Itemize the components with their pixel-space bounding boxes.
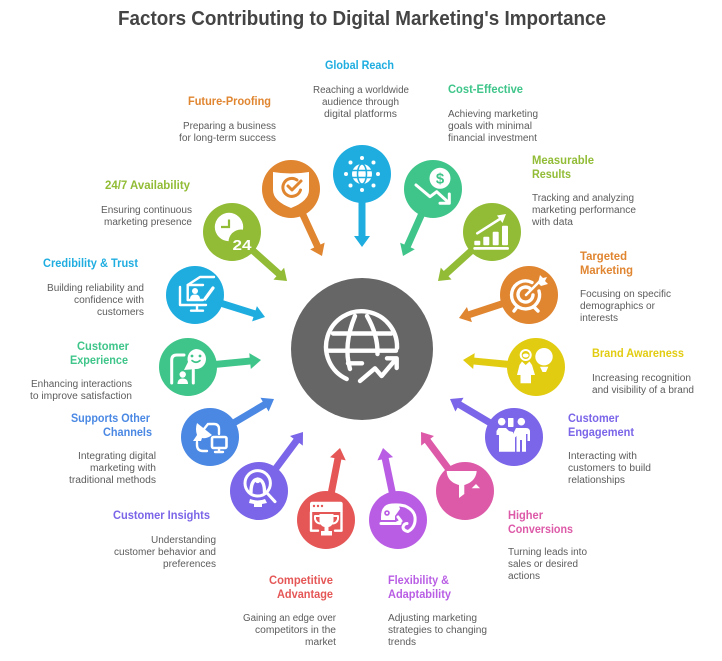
heading and description: to improve satisfaction xyxy=(30,391,132,402)
arrow xyxy=(206,392,278,444)
heading and description: Customer xyxy=(568,411,619,425)
icon: shield with check xyxy=(262,160,320,218)
factor: Global Reach xyxy=(313,58,409,247)
factor: Credibility & Trust xyxy=(43,256,267,325)
icon: globe with growth arrow xyxy=(326,311,397,381)
heading and description: customer behavior and xyxy=(114,547,216,558)
icon: dollar coin with falling arrow: $ xyxy=(436,170,445,188)
heading and description: marketing with xyxy=(90,463,156,474)
factor: Competitive Advantage xyxy=(243,446,355,648)
heading and description: market xyxy=(305,637,336,648)
heading and description: preferences xyxy=(163,559,216,570)
heading and description: Focusing on specific xyxy=(580,289,671,300)
arrow xyxy=(192,287,267,325)
icon: person with smiling speech bubble xyxy=(159,338,217,396)
heading and description xyxy=(69,411,156,486)
heading and description: for long-term success xyxy=(179,133,276,144)
heading and description: Gaining an edge over xyxy=(243,613,337,624)
heading and description: strategies to changing xyxy=(388,625,487,636)
heading and description xyxy=(592,346,694,396)
arrow xyxy=(462,352,537,375)
heading and description: sales or desired xyxy=(508,559,578,570)
heading and description: Customer xyxy=(77,339,129,353)
arrow xyxy=(415,427,472,496)
icon: network globe xyxy=(333,145,391,203)
heading and description: Marketing xyxy=(580,263,633,277)
heading and description: Adaptability xyxy=(388,587,451,601)
heading and description: Understanding xyxy=(151,535,216,546)
heading and description: Integrating digital xyxy=(78,451,156,462)
icon: funnel xyxy=(436,462,494,520)
heading and description xyxy=(388,573,487,648)
heading and description: marketing presence xyxy=(104,217,192,228)
heading and description: Tracking and analyzing xyxy=(532,193,634,204)
icon: magnifier over person xyxy=(230,462,288,520)
heading and description: Cost-Effective xyxy=(448,82,523,96)
arrow xyxy=(318,446,348,522)
heading and description: Future-Proofing xyxy=(188,94,271,108)
heading and description: Measurable xyxy=(532,153,594,167)
heading and description: customers xyxy=(97,307,144,318)
arrow xyxy=(433,225,498,287)
heading and description xyxy=(568,411,651,486)
heading and description: Higher xyxy=(508,508,543,522)
heading and description: Experience xyxy=(70,353,128,367)
heading and description: Preparing a business xyxy=(183,121,276,132)
heading and description: Flexibility & xyxy=(388,573,449,587)
arrow xyxy=(226,226,292,287)
heading and description: Results xyxy=(532,167,571,181)
heading and description: audience through xyxy=(322,97,399,108)
heading and description: Targeted xyxy=(580,249,627,263)
arrow xyxy=(354,173,370,247)
factor: Supports Other Channels xyxy=(69,392,278,486)
heading and description: Ensuring continuous xyxy=(101,205,192,216)
icon: clock with 24 xyxy=(203,203,261,261)
heading and description xyxy=(43,256,144,318)
heading and description: traditional methods xyxy=(69,475,156,486)
heading and description: Increasing recognition xyxy=(592,373,691,384)
central hub: digital marketing globe xyxy=(291,278,433,420)
factor: Targeted Marketing xyxy=(457,249,671,326)
icon: two people at desk xyxy=(485,408,543,466)
title: Factors Contributing to Digital Marketing's Importance xyxy=(118,8,606,30)
arrow xyxy=(187,352,262,375)
factor: Higher Conversions xyxy=(415,427,587,582)
factor: Customer Experience xyxy=(30,338,262,402)
heading and description: marketing performance xyxy=(532,205,636,216)
arrow xyxy=(446,392,518,444)
heading and description: relationships xyxy=(568,475,625,486)
arrow xyxy=(457,287,532,326)
arrow xyxy=(284,185,329,259)
icon: target with dart xyxy=(500,266,558,324)
heading and description: Enhancing interactions xyxy=(31,379,132,390)
arrow xyxy=(396,185,440,259)
icon: clock with 24: 24 xyxy=(232,237,252,254)
heading and description xyxy=(580,249,671,324)
heading and description: Supports Other xyxy=(71,411,150,425)
icon: dollar coin with falling arrow xyxy=(404,160,462,218)
factor: Flexibility & Adaptability xyxy=(369,446,487,648)
heading and description: Customer Insights xyxy=(113,508,210,522)
heading and description: and visibility of a brand xyxy=(592,385,694,396)
heading and description: goals with minimal xyxy=(448,121,532,132)
heading and description: Conversions xyxy=(508,522,573,536)
arrow xyxy=(375,446,406,522)
heading and description: Brand Awareness xyxy=(592,346,684,360)
heading and description: financial investment xyxy=(448,133,537,144)
arrow xyxy=(252,427,309,496)
icon: browser window with trophy xyxy=(297,491,355,549)
heading and description: Competitive xyxy=(269,573,333,587)
icon: person with lightbulb xyxy=(507,338,565,396)
heading and description xyxy=(113,508,216,570)
heading and description: Global Reach xyxy=(325,58,394,72)
factor: Future-Proofing xyxy=(179,94,329,259)
heading and description: Interacting with xyxy=(568,451,637,462)
heading and description: actions xyxy=(508,571,540,582)
heading and description xyxy=(313,58,409,120)
heading and description: competitors in the xyxy=(255,625,336,636)
factor: Customer Insights xyxy=(113,427,309,570)
icon: rising bar chart xyxy=(463,203,521,261)
factor: Measurable Results xyxy=(433,153,636,287)
heading and description: customers to build xyxy=(568,463,651,474)
factor: Cost-Effective xyxy=(396,82,538,259)
heading and description: trends xyxy=(388,637,416,648)
icon: chameleon xyxy=(369,491,427,549)
heading and description xyxy=(101,178,192,228)
heading and description: Channels xyxy=(103,425,152,439)
heading and description xyxy=(448,82,538,144)
heading and description: Building reliability and xyxy=(47,283,144,294)
heading and description: Credibility & Trust xyxy=(43,256,138,270)
heading and description: interests xyxy=(580,313,618,324)
heading and description: Advantage xyxy=(277,587,333,601)
heading and description: demographics or xyxy=(580,301,656,312)
icon: satellite dish and monitor xyxy=(181,408,239,466)
heading and description xyxy=(531,153,636,228)
heading and description: Reaching a worldwide xyxy=(313,85,409,96)
heading and description: Turning leads into xyxy=(508,547,587,558)
heading and description xyxy=(508,508,587,582)
icon: monitor with person and pencil xyxy=(166,266,224,324)
factor: 24/7 Availability xyxy=(101,178,292,287)
heading and description: Engagement xyxy=(568,425,634,439)
factor: Customer Engagement xyxy=(446,392,651,486)
heading and description: 24/7 Availability xyxy=(105,178,190,192)
heading and description xyxy=(30,339,132,402)
heading and description: digital platforms xyxy=(324,109,397,120)
heading and description: Achieving marketing xyxy=(448,109,538,120)
heading and description: with data xyxy=(531,217,573,228)
heading and description xyxy=(243,573,337,648)
heading and description: Adjusting marketing xyxy=(388,613,477,624)
factor: Brand Awareness xyxy=(462,338,694,396)
heading and description xyxy=(179,94,276,144)
heading and description: confidence with xyxy=(74,295,144,306)
